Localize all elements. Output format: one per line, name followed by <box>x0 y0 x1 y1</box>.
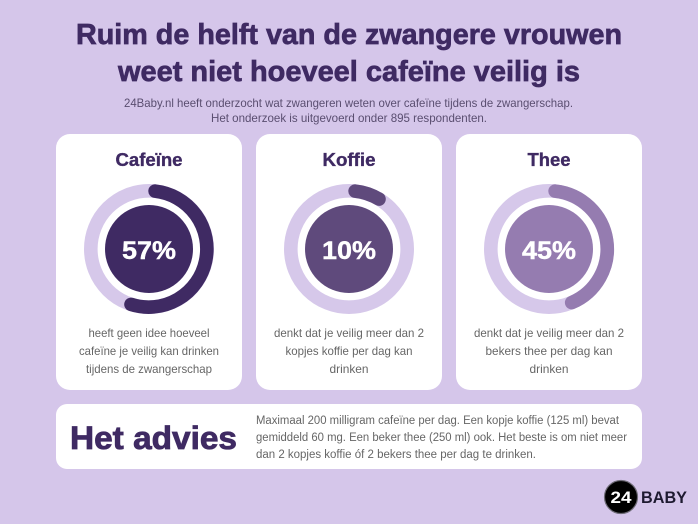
panel: het advies <box>56 404 642 469</box>
subtitle: 24Baby.nl heeft onderzocht wat zwangeren weten over cafeïne tijdens de zwangerschap. <box>124 96 573 110</box>
logo: 24 baby: BABY <box>641 488 688 507</box>
heading: het advies: Het advies <box>70 420 237 456</box>
donut chart: 45%: 45% <box>522 237 576 265</box>
description: koffie: kopjes koffie per dag kan <box>286 344 412 358</box>
title: weet niet hoeveel cafeïne veilig is <box>117 56 580 88</box>
advice text: gemiddeld 60 mg. Een beker thee (250 ml) ook. Het beste is om niet meer <box>256 432 627 444</box>
description: thee: denkt dat je veilig meer dan 2 <box>474 326 624 340</box>
description: koffie <box>274 326 424 376</box>
panel: cafeïne <box>56 134 242 390</box>
donut chart: 57% <box>91 191 207 307</box>
description: thee: bekers thee per dag kan <box>486 344 612 358</box>
panel: thee <box>456 134 642 390</box>
description: cafeïne: heeft geen idee hoeveel <box>88 326 210 340</box>
logo: 24 baby <box>604 480 688 514</box>
title <box>76 19 622 88</box>
subtitle: Het onderzoek is uitgevoerd onder 895 respondenten. <box>211 111 487 125</box>
title: Ruim de helft van de zwangere vrouwen <box>76 19 622 51</box>
description: cafeïne: cafeïne je veilig kan drinken <box>79 344 219 358</box>
advice text: Maximaal 200 milligram cafeïne per dag. Een kopje koffie (125 ml) bevat <box>256 415 620 427</box>
description: koffie: denkt dat je veilig meer dan 2 <box>274 326 424 340</box>
description: thee <box>474 326 624 376</box>
donut chart: 10% <box>291 191 407 307</box>
logo: 24 baby: 24 <box>610 488 632 507</box>
donut chart: 45% <box>491 191 607 307</box>
description: cafeïne: tijdens de zwangerschap <box>86 362 212 376</box>
advice text <box>256 415 627 461</box>
donut chart: 10%: 10% <box>322 237 376 265</box>
advice text: dan 2 kopjes koffie óf 2 bekers thee per dag te drinken. <box>256 449 536 461</box>
heading: thee: Thee <box>528 150 570 170</box>
panel: koffie <box>256 134 442 390</box>
description: koffie: drinken <box>330 362 368 376</box>
heading: cafeïne: Cafeïne <box>116 150 182 170</box>
donut chart: 57%: 57% <box>122 237 176 265</box>
subtitle <box>124 96 573 125</box>
description: cafeïne <box>79 326 219 376</box>
heading: koffie: Koffie <box>322 150 376 170</box>
description: thee: drinken <box>530 362 568 376</box>
